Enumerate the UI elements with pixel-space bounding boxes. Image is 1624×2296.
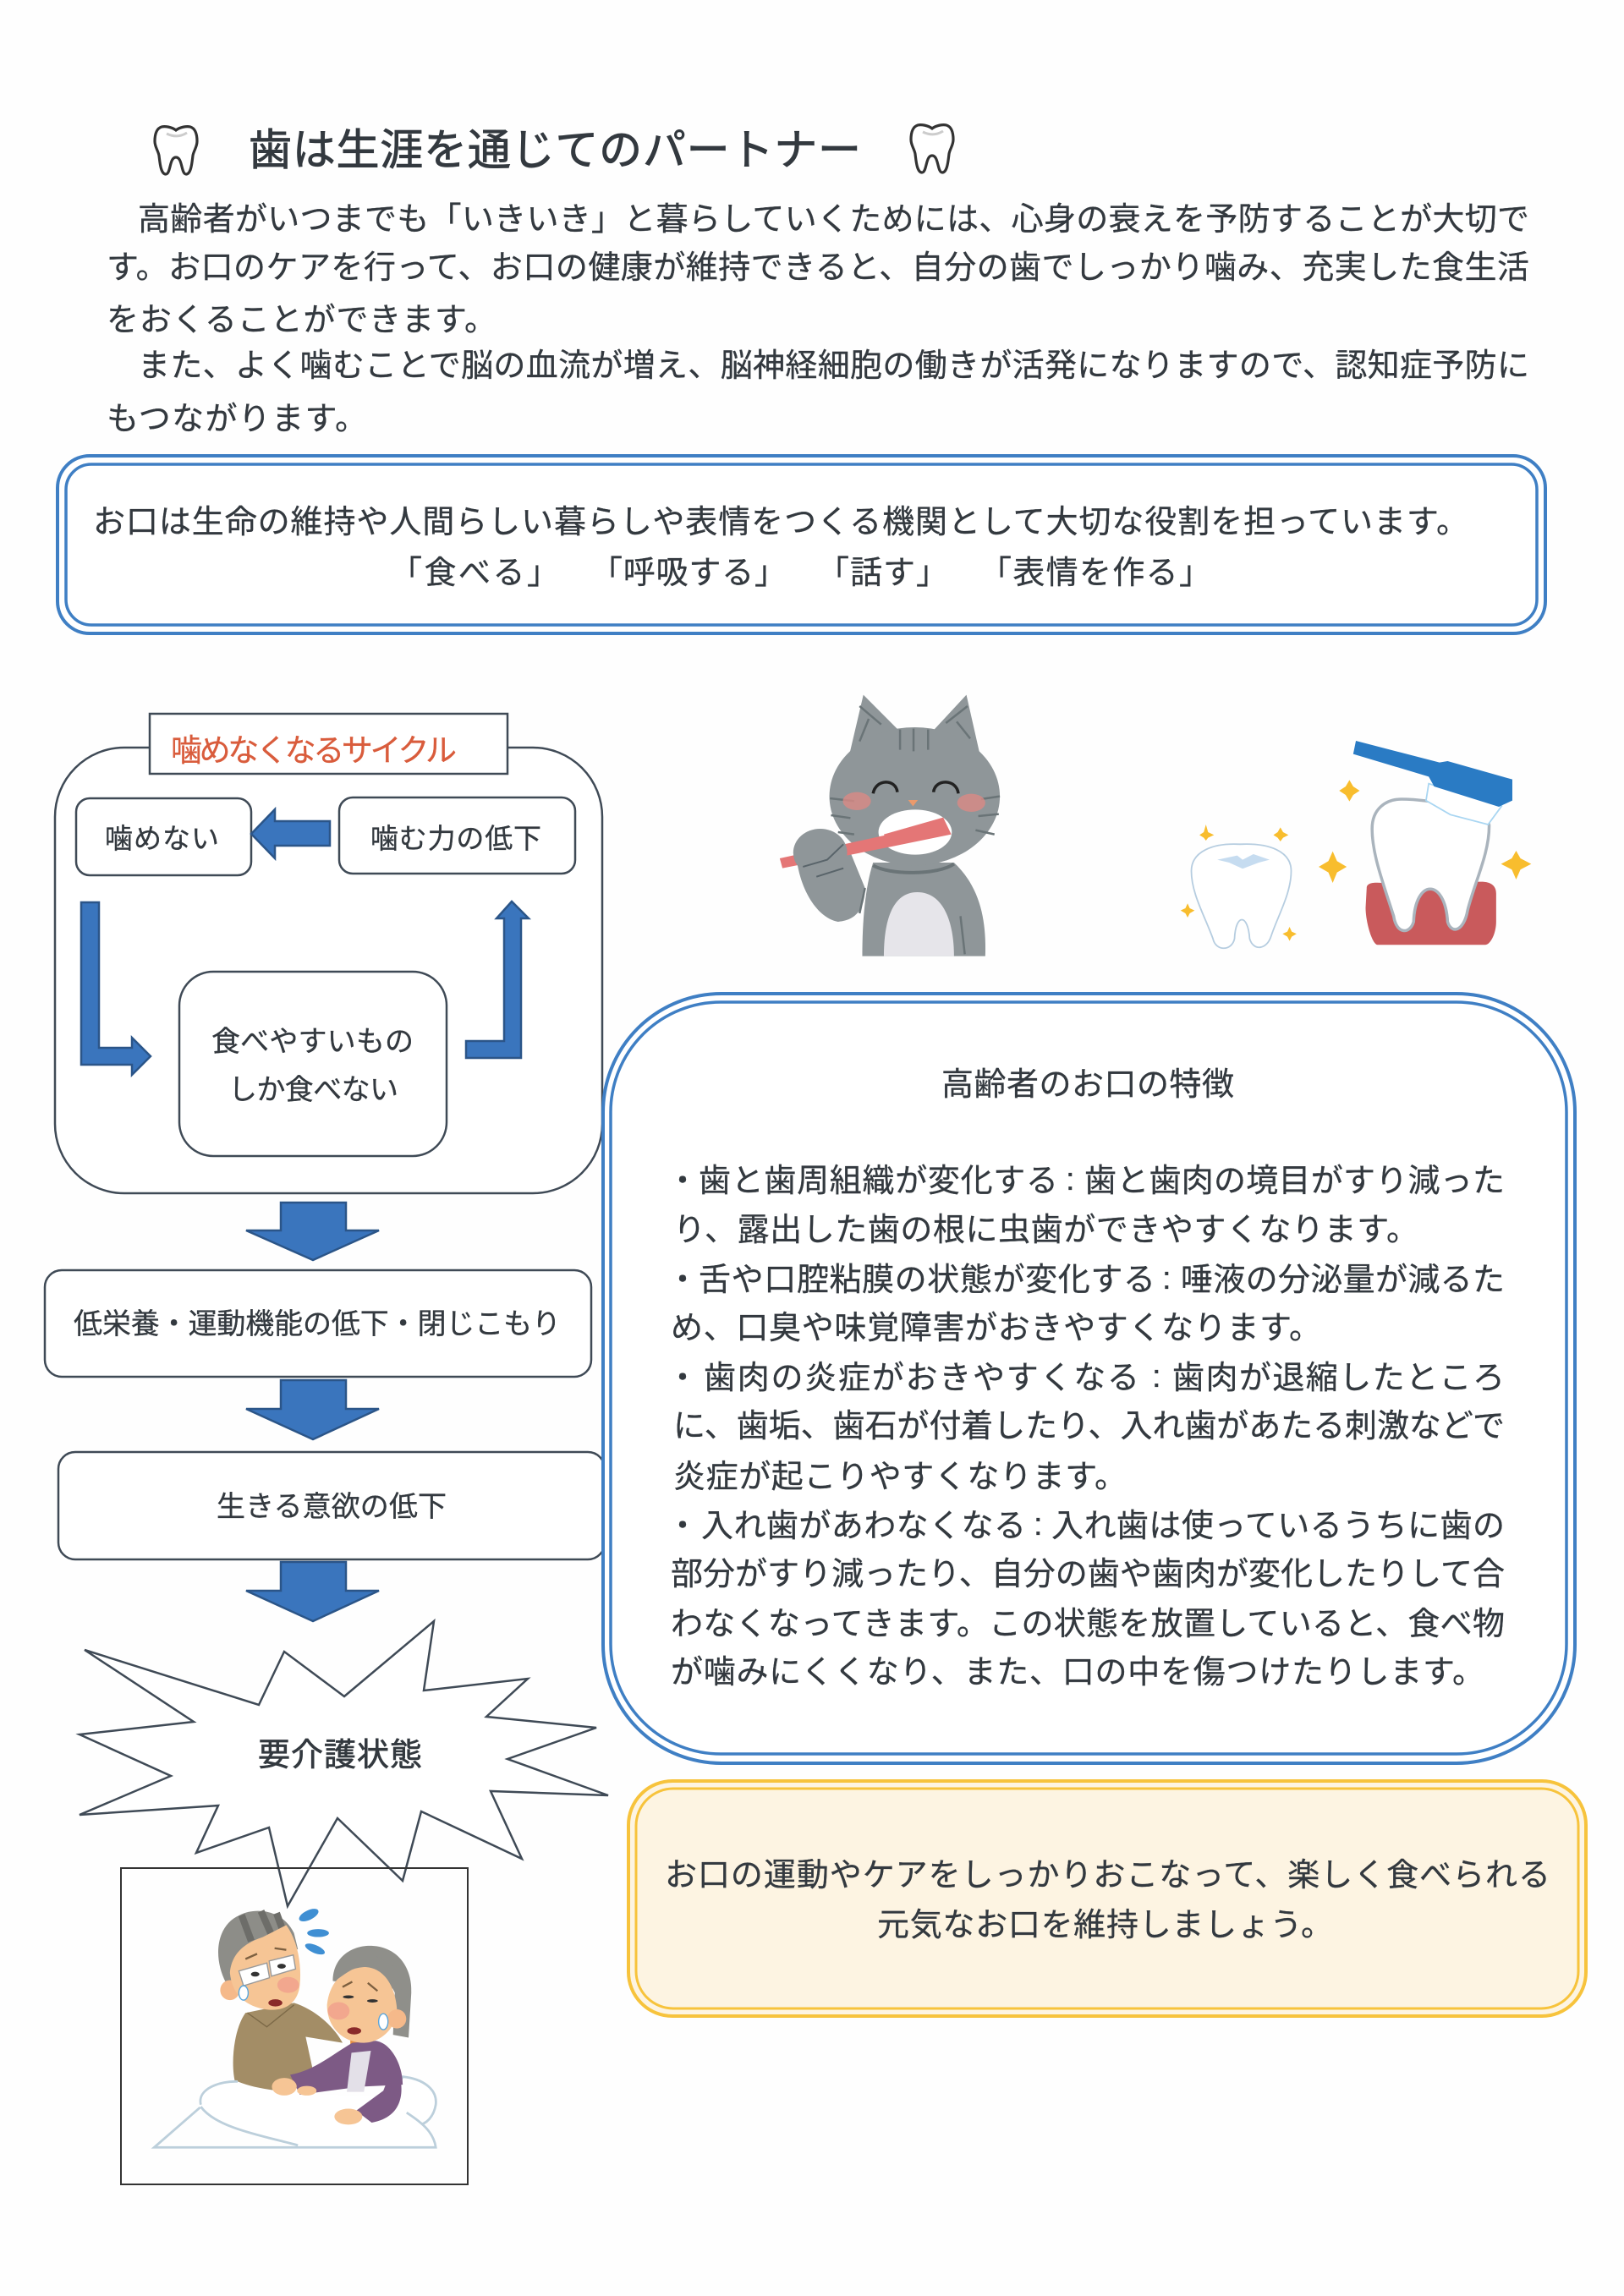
starburst: care-needed state — [80, 1621, 608, 1906]
arrow: down 2 — [246, 1380, 379, 1439]
characteristic 1: 歯と歯肉の境目がすり減った — [1084, 1164, 1505, 1199]
characteristic 2 — [667, 1261, 1505, 1346]
panel: characteristics of the elderly mouth — [603, 994, 1575, 1763]
characteristic 4: 入れ歯があわなくなる — [701, 1509, 1026, 1544]
characteristic 3: ・ — [667, 1361, 699, 1396]
arrow: down then right — [81, 902, 151, 1075]
box: chewing strength declines — [339, 797, 575, 874]
characteristic 4: : — [1034, 1507, 1043, 1543]
box: only soft foods: しか食べない — [228, 1074, 398, 1106]
characteristic 1: り、露出した歯の根に虫歯ができやすくなります。 — [673, 1213, 1418, 1248]
callout: keep a healthy mouth: 元気なお口を維持しましょう。 — [877, 1908, 1333, 1943]
clean tooth — [1192, 844, 1292, 948]
characteristic 2: : — [1162, 1261, 1171, 1296]
icon: tooth right — [911, 125, 953, 173]
box: chewing strength declines: 噛む力の低下 — [370, 823, 541, 854]
panel: cycle of no longer chewing — [55, 714, 602, 1193]
callout: keep a healthy mouth: お口の運動やケアをしっかりおこなって、楽しく食べられる — [665, 1858, 1550, 1893]
box: loss of motivation — [58, 1452, 605, 1559]
title — [155, 125, 953, 174]
panel: role of the mouth: お口は生命の維持や人間らしい暮らしや表情をつくる機関として大切な役割を担っています。 — [93, 505, 1468, 540]
sparkles — [1181, 780, 1531, 941]
box: only soft foods: 食べやすいもの — [211, 1026, 414, 1058]
panel: role of the mouth: 「表情を作る」 — [979, 556, 1211, 591]
starburst: care-needed state: 要介護状態 — [258, 1738, 422, 1773]
title text: 歯は生涯を通じてのパートナー — [249, 126, 861, 174]
arrow: left — [251, 809, 330, 858]
intro text block: もつながります。 — [107, 402, 367, 437]
arrow: down 1 — [246, 1203, 379, 1260]
characteristic 4: わなくなってきます。この状態を放置していると、食べ物 — [671, 1607, 1505, 1642]
characteristic 2: 唾液の分泌量が減るた — [1181, 1263, 1505, 1298]
callout: keep a healthy mouth — [628, 1781, 1586, 2016]
bristles — [1426, 784, 1501, 825]
characteristic 3: 歯肉の炎症がおきやすくなる — [704, 1361, 1139, 1396]
characteristic 2: め、口臭や味覚障害がおきやすくなります。 — [671, 1311, 1321, 1346]
intro text block: また、よく噛むことで脳の血流が増え、脳神経細胞の働きが活発になりますので、認知症予防に — [138, 348, 1529, 384]
gum — [1366, 882, 1496, 945]
box: only soft foods — [179, 972, 447, 1156]
characteristic 4: が噛みにくくなり、また、口の中を傷つけたりします。 — [671, 1655, 1484, 1690]
icon: tooth left — [155, 127, 197, 174]
intro text block: 高齢者がいつまでも「いきいき」と暮らしていくためには、心身の衰えを予防することが大切で — [138, 202, 1529, 238]
cycle heading — [150, 714, 508, 774]
characteristic 2: 舌や口腔粘膜の状態が変化する — [699, 1263, 1155, 1298]
characteristic 4: 入れ歯は使っているうちに歯の — [1051, 1509, 1505, 1544]
illustration: teeth and toothbrush — [1181, 741, 1531, 948]
cycle heading: 噛めなくなるサイクル — [171, 733, 457, 768]
characteristic 1 — [667, 1162, 1505, 1248]
panel: role of the mouth — [58, 456, 1545, 633]
characteristic 1: : — [1066, 1162, 1075, 1197]
characteristic 3: : — [1152, 1359, 1161, 1395]
intro text block: す。お口のケアを行って、お口の健康が維持できると、自分の歯でしっかり噛み、充実した食生活 — [107, 250, 1529, 286]
box: loss of motivation: 生きる意欲の低下 — [217, 1491, 447, 1523]
panel: role of the mouth: 「呼吸する」 — [590, 556, 787, 591]
characteristic 4: 部分がすり減ったり、自分の歯や歯肉が変化したりして合 — [671, 1557, 1505, 1592]
box: cannot chew: 噛めない — [105, 823, 219, 854]
panel: role of the mouth: 「食べる」 — [390, 556, 559, 591]
box: cannot chew — [76, 798, 251, 875]
box: malnutrition — [45, 1270, 591, 1377]
intro text block: をおくることができます。 — [107, 303, 497, 338]
characteristic 4: ・ — [667, 1509, 699, 1544]
characteristic 1: ・ — [667, 1164, 699, 1199]
brushed tooth — [1372, 799, 1490, 930]
panel heading: 高齢者のお口の特徴 — [941, 1067, 1234, 1103]
illustration: cat brushing teeth — [780, 695, 1000, 956]
intro text block — [107, 202, 1529, 437]
box: malnutrition: 低栄養・運動機能の低下・閉じこもり — [74, 1308, 561, 1340]
characteristic 2: ・ — [667, 1263, 699, 1298]
panel: role of the mouth: 「話す」 — [817, 556, 948, 591]
characteristic 4 — [667, 1507, 1505, 1690]
toothbrush head — [1353, 741, 1512, 807]
arrow: down 3 — [246, 1562, 379, 1621]
arrow: right then up — [466, 901, 529, 1058]
characteristic 3: 炎症が起こりやすくなります。 — [673, 1460, 1127, 1495]
characteristic 3: 歯肉が退縮したところ — [1172, 1361, 1505, 1396]
illustration: elderly couple — [154, 1906, 436, 2147]
picture frame with elderly couple — [121, 1868, 468, 2184]
characteristic 1: 歯と歯周組織が変化する — [699, 1164, 1058, 1199]
characteristic 3 — [667, 1359, 1505, 1495]
characteristic 3: に、歯垢、歯石が付着したり、入れ歯があたる刺激などで — [673, 1409, 1505, 1444]
